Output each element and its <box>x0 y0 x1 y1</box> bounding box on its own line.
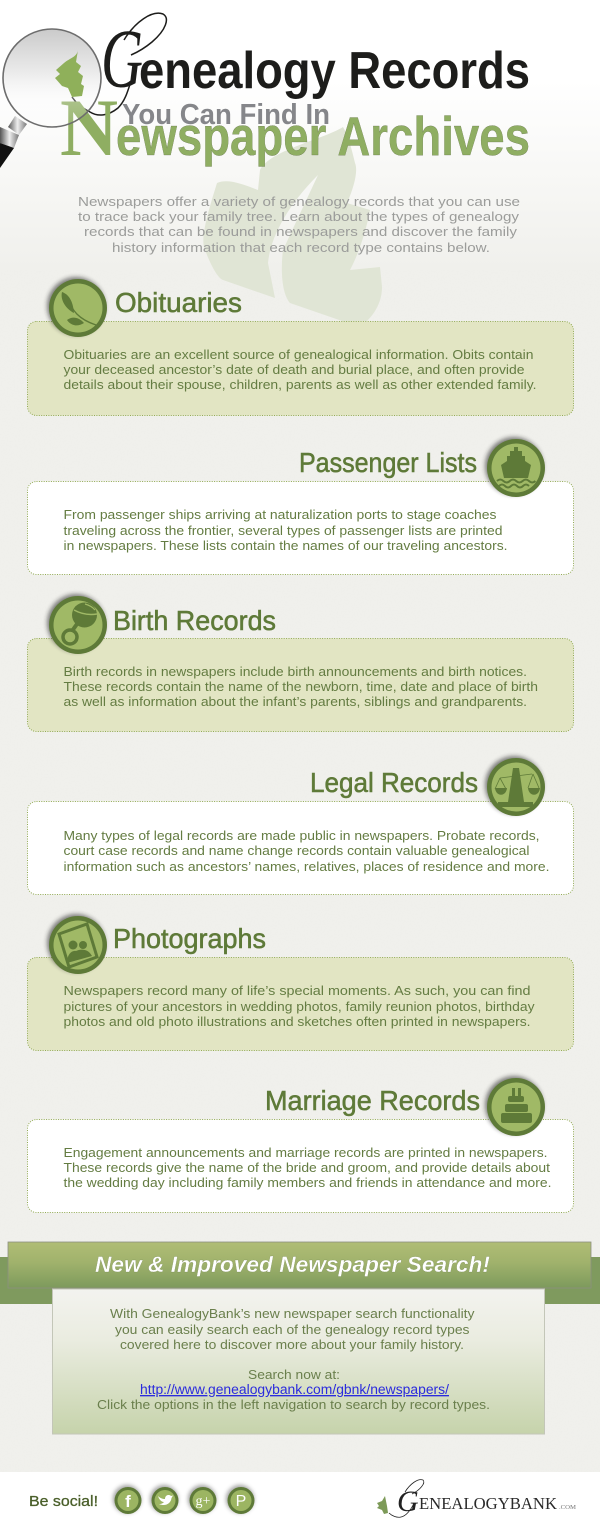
heading: birth records: Birth Records <box>113 605 276 636</box>
icon: leaf badge <box>47 277 107 337</box>
heading: marriage records: Marriage Records <box>265 1085 480 1116</box>
intro text: history information that each record type contains below. <box>112 240 490 255</box>
logo script G: G <box>397 1485 419 1518</box>
callout text: With GenealogyBank’s new newspaper search functionality <box>110 1306 475 1321</box>
intro text: records that can be found in newspapers and discover the family <box>84 224 517 239</box>
body text <box>64 347 536 392</box>
title: big N: N <box>60 82 118 173</box>
body text: in newspapers. These lists contain the names of our traveling ancestors. <box>64 538 508 553</box>
intro text: Newspapers offer a variety of genealogy records that you can use <box>78 194 520 209</box>
logo leaf <box>377 1496 388 1514</box>
body text: photos and old photo illustrations and sketches often printed in newspapers. <box>64 1014 530 1029</box>
heading: photographs: Photographs <box>113 923 266 954</box>
icon: twitter <box>150 1485 178 1514</box>
body text: From passenger ships arriving at naturalization ports to stage coaches <box>64 507 497 522</box>
body text: These records give the name of the bride and groom, and provide details about <box>64 1160 550 1175</box>
title <box>60 13 530 173</box>
body text <box>64 983 535 1029</box>
footer <box>0 1472 600 1531</box>
icon: pinterest <box>226 1485 254 1514</box>
icon: facebook: f <box>125 1492 131 1511</box>
icon: facebook <box>113 1485 142 1514</box>
body text: pictures of your ancestors in wedding photos, family reunion photos, birthday <box>64 999 535 1014</box>
panel: birth records <box>28 594 574 732</box>
banner heading: New & Improved Newspaper Search! <box>95 1252 490 1277</box>
icon: ship badge <box>485 437 545 497</box>
callout text: you can easily search each of the genealogy record types <box>115 1322 470 1337</box>
callout box <box>52 1289 544 1434</box>
icon: leaf in lens <box>55 50 84 97</box>
icon: scales badge <box>485 756 545 816</box>
callout text: covered here to discover more about your family history. <box>120 1337 464 1352</box>
body text <box>64 507 508 553</box>
body text: information such as ancestors’ names, relatives, places of residence and more. <box>64 859 550 874</box>
heading: obituaries: Obituaries <box>115 287 242 318</box>
panel: marriage records <box>28 1076 574 1212</box>
body text: traveling across the frontier, several types of passenger lists are printed <box>64 523 502 538</box>
title: script G: G <box>101 13 143 106</box>
icon: cake badge <box>485 1076 545 1136</box>
logo script G <box>389 1480 424 1518</box>
icon: rattle badge <box>47 594 107 654</box>
callout text: Search now at: <box>248 1367 340 1382</box>
body text <box>64 664 538 709</box>
panel: obituaries <box>28 277 574 416</box>
watermark leaf <box>203 127 382 322</box>
title: genealogy records: enealogy Records <box>139 42 530 100</box>
intro text <box>78 194 520 255</box>
link: http://www.genealogybank.com/gbnk/newspapers/ <box>140 1382 449 1397</box>
be social label: Be social! <box>29 1493 98 1510</box>
callout text <box>97 1306 490 1412</box>
icon: google plus: g+ <box>196 1494 211 1509</box>
body text: your deceased ancestor’s date of death and burial place, and often provide <box>64 362 524 377</box>
callout text: Click the options in the left navigation to search by record types. <box>97 1397 490 1412</box>
body text: the wedding day including family members and friends in attendance and more. <box>64 1175 552 1190</box>
icon: google plus <box>188 1485 216 1514</box>
body text: These records contain the name of the newborn, time, date and place of birth <box>64 679 538 694</box>
body text: as well as information about the infant’s parents, siblings and grandparents. <box>64 694 527 709</box>
body text: Many types of legal records are made public in newspapers. Probate records, <box>64 828 540 843</box>
body text: Obituaries are an excellent source of genealogical information. Obits contain <box>64 347 534 362</box>
body text: Engagement announcements and marriage records are printed in newspapers. <box>64 1145 548 1160</box>
heading: legal records: Legal Records <box>310 767 478 798</box>
icon: photo badge <box>47 914 107 974</box>
heading: passenger lists: Passenger Lists <box>299 447 477 478</box>
body text: court case records and name change records contain valuable genealogical <box>64 843 530 858</box>
body text: Newspapers record many of life’s special moments. As such, you can find <box>64 983 530 998</box>
body text: details about their spouse, children, parents as well as other extended family. <box>64 377 536 392</box>
body text: Birth records in newspapers include birth announcements and birth notices. <box>64 664 527 679</box>
ribbon tails <box>0 1257 600 1304</box>
logo .com: .COM <box>559 1505 577 1511</box>
title: script G <box>72 13 166 115</box>
body text <box>64 1145 552 1190</box>
intro text: to trace back your family tree. Learn about the types of genealogy <box>78 209 519 224</box>
panel: photographs <box>28 914 574 1050</box>
logo: GenealogyBank <box>377 1480 577 1518</box>
panel: passenger lists <box>28 437 574 574</box>
logo wordmark: ENEALOGYBANK <box>419 1494 558 1513</box>
icon: pinterest: P <box>236 1493 246 1510</box>
banner ribbon <box>8 1242 591 1288</box>
body text <box>64 828 550 874</box>
icon: magnifying glass <box>0 29 101 168</box>
panel: legal records <box>28 756 574 894</box>
title: you can find in: You Can Find In <box>122 99 330 131</box>
